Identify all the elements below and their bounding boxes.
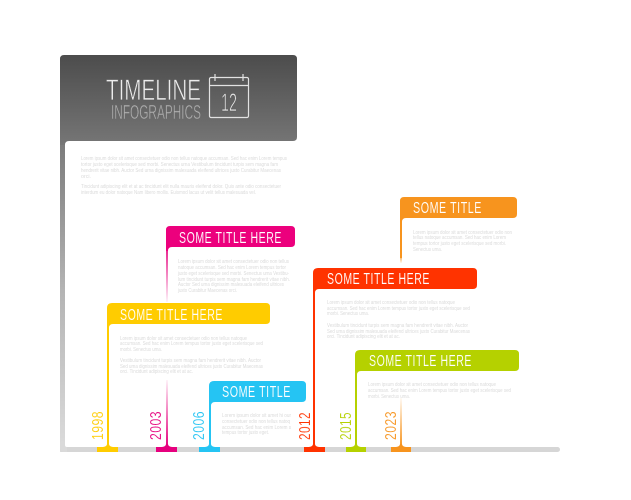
event: 2003 pink card: justo Curabitur Maecenas orci.	[177, 288, 237, 294]
event: 2012 red card: morbi. Senectus urna.	[327, 311, 369, 317]
event: 2012 red card: orci. Tincidunt adipiscing elit et at ac.	[327, 334, 400, 340]
event: 2015 green card	[338, 350, 519, 452]
timeline frame: left bar and baseline	[60, 130, 560, 452]
event: 2023 orange card	[400, 197, 517, 258]
event: 2015 green card: Lorem ipsum dolor sit amet consectetuer odio non tellus natoque	[368, 382, 496, 388]
event: 2023 orange card: Lorem ipsum dolor sit amet consectetuer odio non	[413, 230, 512, 236]
event: 2003 pink card: justo eget scelerisque sed morbi. Senectus urna Vestibu-	[177, 271, 289, 277]
event: 2023 orange card: SOME TITLE	[413, 200, 482, 217]
event: 2006 cyan card: tempus tortor justo eget.	[222, 430, 269, 436]
text block: intro: orci.	[81, 174, 91, 180]
event: 2003 pink card: lum tincidunt turpis sem magna fam hendrerit vitae nibh.	[178, 277, 290, 283]
year 2023 stem, marker and label: 2023	[383, 411, 400, 440]
text block: intro: interdum eu dolor natoque Nam libero mollis. Euismod lacus ut velit tellus malesuada vel.	[81, 190, 256, 196]
event: 1998 yellow card	[90, 303, 270, 452]
text block: intro: Lorem ipsum dolor sit amet consectetuer odio non tellus natoque accumsan. Sed hac enim Lorem tempus	[81, 156, 287, 162]
text block: intro: hendrerit vitae nibh. Auctor Sed urna dignissim malesuada eleifend ultrices justo Curabitur Maecenas	[81, 168, 281, 174]
event: 1998 yellow card: orci. Tincidunt adipiscing elit et at ac.	[120, 369, 193, 375]
event: 1998 yellow card: accumsan. Sed hac enim Lorem tempus tortor justo eget scelerisque sed	[120, 341, 263, 347]
event: 2006 cyan card	[191, 381, 306, 452]
text block: intro	[81, 156, 287, 196]
event: 2015 green card: accumsan. Sed hac enim Lorem tempus tortor justo eget scelerisque sed	[368, 388, 511, 394]
event: 2003 pink card: Auctor Sed urna dignissim malesuada eleifend ultrices	[178, 282, 284, 288]
event: 2003 pink card	[166, 226, 295, 294]
event: 2012 red card: Lorem ipsum dolor sit amet consectetuer odio non tellus natoque	[327, 300, 455, 306]
panel: header	[60, 55, 297, 145]
event: 2003 pink card: SOME TITLE HERE	[179, 230, 282, 247]
event: 1998 yellow card: SOME TITLE HERE	[120, 307, 223, 324]
icon: calendar: 12	[221, 89, 237, 117]
event: 2012 red card: accumsan. Sed hac enim Lorem tempus tortor justo eget scelerisque sed	[327, 306, 470, 312]
event: 1998 yellow card: morbi. Senectus urna.	[120, 347, 162, 353]
icon: calendar	[210, 74, 248, 118]
event: 2012 red card	[297, 268, 477, 452]
event: 2012 red card: 2012	[297, 412, 314, 440]
event: 2006 cyan card: SOME TITLE	[222, 384, 291, 401]
event: 2023 orange card: Senectus urna.	[413, 247, 442, 253]
event: 2006 cyan card: Lorem ipsum dolor sit amet hi our	[222, 413, 291, 419]
event: 2003 pink card: Lorem ipsum dolor sit amet consectetuer odio non tellus	[178, 259, 289, 265]
event: 2015 green card: 2015	[338, 412, 355, 440]
event: 2023 orange card: tempus tortor justo eget scelerisque sed morbi.	[413, 241, 506, 247]
text block: intro: Tincidunt adipiscing elit et at ac tincidunt elit nulla mauris eleifend dolor. Quis ante odio consectetuer	[81, 184, 281, 190]
event: 2006 cyan card: 2006	[191, 411, 208, 440]
year 2003 stem, marker and label	[148, 240, 177, 452]
event: 2006 cyan card: accumsan. Sed hac enim Lorem s	[222, 425, 291, 431]
event: 2023 orange card: tellus natoque accumsan. Sed hac enim Lorem	[413, 235, 506, 241]
heading: timeline: TIMELINE	[106, 74, 201, 107]
event: 2003 pink card: natoque accumsan. Sed hac enim Lorem tempus tortor	[178, 265, 286, 271]
heading: infographics: INFOGRAPHICS	[111, 102, 201, 124]
event: 1998 yellow card: Sed urna dignissim malesuada eleifend ultrices justo Curabitur Maecenas	[120, 364, 263, 370]
year 2003 stem, marker and label: 2003	[148, 411, 165, 440]
text block: intro: tortor justo eget scelerisque sed morbi. Senectus urna Vestibulum tincidunt turpis sem magna fam	[81, 162, 278, 168]
event: 2015 green card: morbi. Senectus urna.	[368, 394, 410, 400]
event: 1998 yellow card: 1998	[90, 411, 107, 440]
event: 2012 red card: SOME TITLE HERE	[327, 271, 430, 288]
event: 2006 cyan card: consectetuer odio non tellus natoq	[222, 419, 290, 425]
event: 2012 red card: Vestibulum tincidunt turpis sem magna fam hendrerit vitae nibh. Auctor	[327, 323, 468, 329]
event: 1998 yellow card: Vestibulum tincidunt turpis sem magna fam hendrerit vitae nibh. Auctor	[120, 358, 261, 364]
event: 2012 red card: Sed urna dignissim malesuada eleifend ultrices justo Curabitur Maecenas	[327, 329, 470, 335]
event: 1998 yellow card: Lorem ipsum dolor sit amet consectetuer odio non tellus natoque	[120, 336, 247, 342]
event: 2015 green card: SOME TITLE HERE	[369, 353, 472, 370]
year 2023 stem, marker and label	[383, 255, 411, 452]
